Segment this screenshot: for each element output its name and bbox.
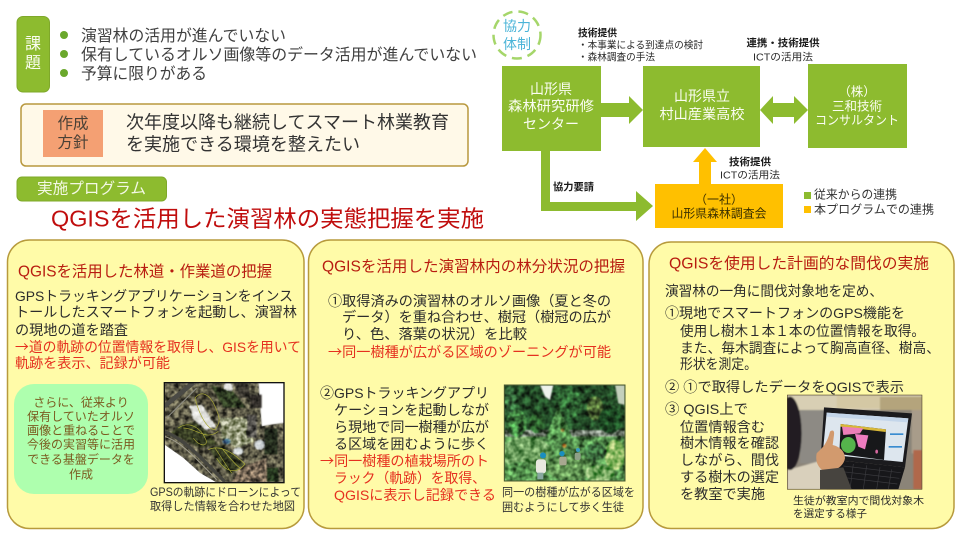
photo caption: 取得した情報を合わせた地図 xyxy=(150,500,295,513)
badge: cooperation structure: 協力 xyxy=(503,18,531,34)
step 3 text: 樹木情報を確認 xyxy=(680,435,779,451)
heading: QGISを使用した計画的な間伐の実施 xyxy=(669,254,929,272)
panel: forest road survey xyxy=(8,240,304,528)
step 1 text xyxy=(328,293,611,362)
box: survey association: 山形県森林調査会 xyxy=(672,206,766,220)
step 1 text: データ）を重ね合わせ、樹冠（樹冠の広が xyxy=(342,309,611,325)
policy panel xyxy=(21,104,468,166)
box: research center: 森林研究研修 xyxy=(508,98,594,114)
body text: の現地の道を踏査 xyxy=(15,322,128,338)
callout: base data: 作成 xyxy=(69,468,93,482)
step 1 text: ①取得済みの演習林のオルソ画像（夏と冬の xyxy=(328,293,611,309)
arrow: research center to survey association xyxy=(541,151,653,221)
callout: base data: さらに、従来より xyxy=(33,396,129,410)
step 1 text: また、毎木調査によって胸高直径、樹高、 xyxy=(680,340,940,356)
policy label xyxy=(43,110,103,157)
callout: base data: 保有していたオルソ xyxy=(27,410,135,424)
policy label: 作成 xyxy=(57,114,89,132)
policy label: 方針 xyxy=(57,134,89,152)
heading: QGISを活用した演習林内の林分状況の把握 xyxy=(322,258,625,276)
callout: base data: 今後の実習等に活用 xyxy=(27,436,135,452)
label: technical support 1: ・本事業による到達点の検討 xyxy=(578,38,703,52)
challenge label: 題 xyxy=(25,55,41,72)
legend: 従来からの連携 xyxy=(814,186,897,202)
step 1 text: 形状を測定。 xyxy=(680,356,757,372)
callout: base data: できる基盤データを xyxy=(27,452,135,466)
program label xyxy=(17,177,166,201)
step 2 text: ら現地で同一樹種が広が xyxy=(334,419,489,435)
label: technical support 2: ICTの活用法 xyxy=(720,170,780,182)
box: survey association: （一社） xyxy=(695,192,743,206)
program label: 実施プログラム xyxy=(37,180,146,198)
label: technical support 2 xyxy=(720,156,780,182)
badge: cooperation structure: 体制 xyxy=(503,36,531,52)
main title: QGISを活用した演習林の実態把握を実施 xyxy=(51,206,484,232)
step 3 text: する樹木の選定 xyxy=(680,469,779,485)
intro text: 演習林の一角に間伐対象地を定め、 xyxy=(665,283,883,299)
policy text: を実施できる環境を整えたい xyxy=(126,134,360,154)
policy text: 次年度以降も継続してスマート林業教育 xyxy=(126,112,449,132)
step 1 text: り、色、落葉の状況）を比較 xyxy=(342,326,527,342)
challenge list: 保有しているオルソ画像等のデータ活用が進んでいない xyxy=(81,45,477,64)
panel: planned thinning xyxy=(649,242,954,528)
step 1 text xyxy=(665,305,940,372)
label: cooperation and technical support: ICTの活用法 xyxy=(753,52,813,64)
body text: トールしたスマートフォンを起動し、演習林 xyxy=(15,304,297,320)
label: technical support 1 xyxy=(578,26,703,64)
callout: base data: 画像と重ねることで xyxy=(27,424,135,438)
step 2 text: →同一樹種の植栽場所のト xyxy=(320,451,489,471)
photo caption xyxy=(793,494,925,520)
box: consultant: （株） xyxy=(838,84,876,99)
photo caption xyxy=(502,485,635,514)
step 2 text: ② ①で取得したデータをQGISで表示 xyxy=(665,379,904,395)
label: cooperation and technical support: 連携・技術提供 xyxy=(746,36,820,50)
box: research center: センター xyxy=(523,116,579,132)
arrow: survey association to high school xyxy=(693,148,717,184)
panel: forest stand survey xyxy=(308,240,643,528)
step 3 text: しながら、間伐 xyxy=(680,452,779,468)
photo caption: 生徒が教室内で間伐対象木 xyxy=(793,494,925,507)
challenge list: 演習林の活用が進んでいない xyxy=(81,27,286,45)
box: research center xyxy=(502,66,601,151)
arrow: research center to high school xyxy=(601,96,643,124)
step 2 text xyxy=(320,385,496,503)
body text: →道の軌跡の位置情報を取得し、GISを用いて xyxy=(15,337,301,357)
step 2 text: QGISに表示し記録できる xyxy=(334,487,496,503)
photo caption: GPSの軌跡にドローンによって xyxy=(150,485,301,499)
photo: drone orthophoto map with GPS tracks xyxy=(164,383,284,483)
step 1 text: 使用し樹木１本１本の位置情報を取得。 xyxy=(680,323,925,339)
box: consultant xyxy=(808,64,907,148)
body text: 軌跡を表示、記録が可能 xyxy=(15,355,170,371)
step 3 text xyxy=(665,401,779,502)
photo caption: 同一の樹種が広がる区域を xyxy=(502,485,635,499)
step 1 text: →同一樹種が広がる区域のゾーニングが可能 xyxy=(328,342,611,362)
photo caption: を選定する様子 xyxy=(793,507,868,520)
box: research center: 山形県 xyxy=(530,81,572,97)
box: high school xyxy=(643,66,760,147)
label: cooperation request: 協力要請 xyxy=(553,180,594,194)
challenge label xyxy=(17,16,50,92)
legend xyxy=(804,186,934,216)
box: high school: 山形県立 xyxy=(674,88,730,104)
arrow: two-way school and consultant xyxy=(760,96,808,124)
label: cooperation and technical support xyxy=(746,36,820,64)
body text: GPSトラッキングアプリケーションをインス xyxy=(15,288,293,304)
step 2 text: ラック（軌跡）を取得、 xyxy=(334,470,486,486)
photo caption: 囲むようにして歩く生徒 xyxy=(502,500,624,514)
policy text xyxy=(126,112,449,154)
box: consultant: 三和技術 xyxy=(832,98,882,114)
step 2 text: ケーションを起動しなが xyxy=(334,402,489,418)
step 2 text: る区域を囲むように歩く xyxy=(334,436,489,452)
photo caption xyxy=(150,485,301,513)
step 1 text: ①現地でスマートフォンのGPS機能を xyxy=(665,305,905,321)
challenge list: 予算に限りがある xyxy=(81,64,207,83)
photo: students walking in forest xyxy=(502,385,625,482)
step 3 text: を教室で実施 xyxy=(680,486,765,502)
label: technical support 1: ・森林調査の手法 xyxy=(578,50,655,64)
step 3 text: ③ QGIS上で xyxy=(665,401,748,417)
photo: student using QGIS on a laptop xyxy=(778,395,922,489)
step 3 text: 位置情報含む xyxy=(680,419,765,435)
badge: cooperation structure xyxy=(494,12,540,58)
box: consultant: コンサルタント xyxy=(815,114,899,128)
box: survey association xyxy=(655,184,783,228)
challenge list xyxy=(60,27,477,83)
step 2 text: ②GPSトラッキングアプリ xyxy=(320,385,489,401)
heading: QGISを活用した林道・作業道の把握 xyxy=(18,262,272,280)
challenge label: 課 xyxy=(25,36,41,53)
box: high school: 村山産業高校 xyxy=(660,106,744,122)
body text xyxy=(15,288,301,371)
cooperation diagram xyxy=(494,12,934,228)
callout: base data xyxy=(14,384,148,494)
label: technical support 1: 技術提供 xyxy=(578,26,617,40)
label: technical support 2: 技術提供 xyxy=(729,156,771,168)
legend: 本プログラムでの連携 xyxy=(814,202,934,216)
